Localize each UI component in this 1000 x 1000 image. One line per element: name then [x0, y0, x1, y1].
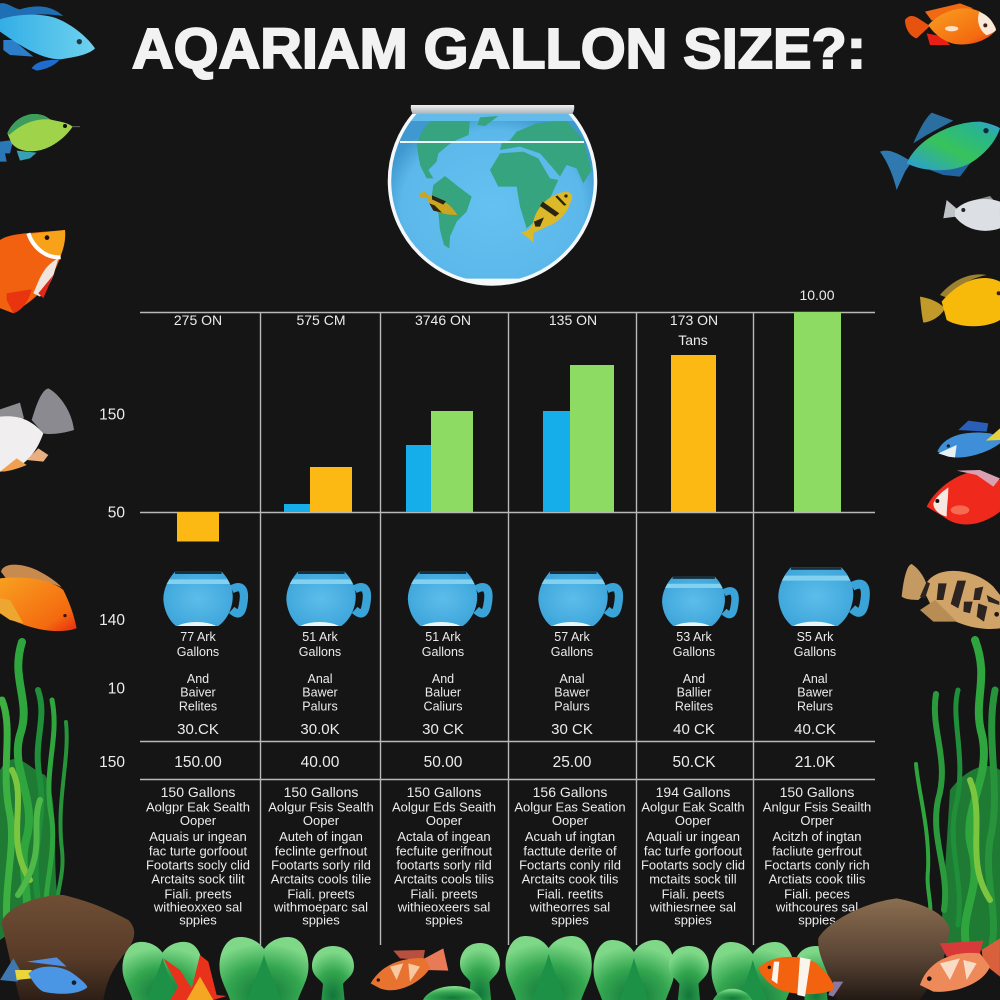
chart column headers: Tans	[678, 332, 708, 348]
chart column headers: 575 CM	[296, 312, 346, 328]
fish: orange clownfish left	[0, 230, 65, 313]
column 4 tank labels: Gallons	[551, 645, 593, 659]
column 5 tank labels: Gallons	[673, 645, 715, 659]
title: AQARIAM GALLON SIZE?:	[132, 17, 866, 81]
chart column headers: 10.00	[799, 287, 835, 303]
column 6 tank labels: Anal	[802, 672, 828, 686]
column 4 description: 156 Gallons	[533, 784, 607, 800]
chart column headers: 3746 ON	[415, 312, 471, 328]
column 2 description: feclinte gerfnout	[275, 844, 368, 858]
fish: small blue right	[937, 421, 1000, 458]
column 5 description: Fiali. peets	[662, 886, 725, 902]
fish: yellow right	[920, 274, 1000, 326]
fish: flame bottom	[163, 955, 227, 1000]
column 2 description: 150 Gallons	[284, 784, 358, 800]
icon: large bowl fish	[521, 192, 572, 243]
column 2 tank labels: Bawer	[302, 686, 338, 700]
column 2 tank labels: 30.0K	[300, 721, 340, 738]
column 6 tank labels: Gallons	[794, 645, 836, 659]
column 1 description: Arctaits sock tilit	[151, 872, 245, 886]
column 2 tank labels: Gallons	[299, 645, 341, 659]
column 3 description: Fiali. preets	[410, 886, 478, 902]
fish: green left	[0, 114, 80, 162]
column 5 description: Footarts socly clid	[641, 858, 745, 872]
column 4 description	[514, 784, 626, 928]
column 6 tank labels: 40.CK	[794, 721, 836, 738]
fish: red white bottom right	[920, 938, 1000, 992]
column 5 description: 194 Gallons	[656, 784, 730, 800]
column 1 tank labels: Relites	[179, 700, 217, 714]
column 4 description: Foctarts conly rild	[519, 858, 621, 872]
column 1 description: 150 Gallons	[161, 784, 235, 800]
column 5 tank labels: 40 CK	[673, 721, 715, 738]
column 5 description: mctaits sock till	[649, 872, 737, 886]
column 2 description: Ooper	[303, 813, 340, 828]
column 1 description: Aquais ur ingean	[149, 829, 247, 844]
column 3 description: Actala of ingean	[397, 829, 491, 844]
column 6 description	[763, 784, 871, 928]
column 6 description: Orper	[800, 813, 834, 828]
column 6 tank labels: 21.0K	[795, 754, 836, 771]
column 2 tank labels: Anal	[307, 672, 333, 686]
column 1 tank labels: 150.00	[174, 754, 222, 771]
column 6 tank labels	[794, 630, 836, 771]
column 5 description: sppies	[674, 912, 712, 928]
column 2 description: withmoeparc sal	[273, 900, 368, 914]
chart column headers: 173 ON	[670, 312, 718, 328]
column 5 description: Ooper	[675, 813, 712, 828]
column 3 description: Aolgur Eds Seaith	[392, 800, 496, 814]
column 3 tank labels: And	[432, 672, 454, 686]
column 6 description: Anlgur Fsis Seailth	[763, 800, 871, 814]
column 5 tank labels: 53 Ark	[676, 630, 712, 644]
column 2 description: Fiali. preets	[287, 886, 355, 902]
seaweed left	[0, 642, 67, 945]
column 3 description: fecfuite gerifnout	[396, 844, 492, 858]
column 2 description: Footarts sorly rild	[271, 858, 371, 872]
column 5 tank labels: Relites	[675, 700, 713, 714]
column 6 tank labels: Relurs	[797, 700, 833, 714]
column 3 tank labels: 51 Ark	[425, 630, 461, 644]
icon: small bowl fish	[419, 192, 457, 215]
column 5 description: Aquali ur ingean	[646, 829, 740, 844]
column 2 description: Auteh of ingan	[279, 829, 363, 844]
fish: red white right	[927, 470, 1000, 524]
column 4 description: witheorres sal	[529, 900, 610, 914]
axis labels: 10	[108, 680, 125, 698]
column 4 description: Arctaits cook tilis	[522, 872, 619, 886]
column 6 tank labels: Bawer	[797, 686, 833, 700]
column 1 description: Footarts socly clid	[146, 858, 250, 872]
column 2 description: Arctaits cools tilie	[271, 872, 371, 886]
column 2 tank labels	[299, 630, 341, 771]
column 6 description: Fiali. peces	[784, 886, 850, 902]
column 3 tank labels: Gallons	[422, 645, 464, 659]
column 3 description: Ooper	[426, 813, 463, 828]
column 3 tank labels: 30 CK	[422, 721, 464, 738]
column 2 description	[268, 784, 374, 928]
column 3 description	[392, 784, 496, 928]
column 5 tank labels	[672, 630, 716, 771]
fish: clownfish bottom	[758, 957, 843, 997]
column 2 tank labels: 40.00	[301, 754, 340, 771]
column 5 tank labels: 50.CK	[672, 754, 716, 771]
column 1 description: withieoxxeo sal	[153, 900, 242, 914]
bar chart	[177, 312, 841, 542]
column 3 tank labels: 50.00	[424, 754, 463, 771]
column 1 description: fac turte gorfoout	[149, 844, 248, 858]
column 5 description: withiesrnee sal	[649, 900, 736, 914]
column 1 tank labels	[174, 630, 222, 771]
column 4 tank labels: Anal	[559, 672, 585, 686]
chart column headers	[174, 287, 835, 348]
column 4 tank labels: Bawer	[554, 686, 590, 700]
column 6 description: 150 Gallons	[780, 784, 854, 800]
column 1 description	[146, 784, 250, 928]
column 6 description: withcoures sal	[775, 900, 858, 914]
column 1 description: sppies	[179, 912, 217, 928]
fish: orange top right	[905, 3, 996, 45]
column 4 description: Aolgur Eas Seation	[514, 800, 626, 814]
column 4 tank labels: 30 CK	[551, 721, 593, 738]
column 4 description: Acuah uf ingtan	[525, 829, 615, 844]
column 6 description: Arctiats cook tilis	[769, 872, 866, 886]
column 5 description	[641, 784, 745, 928]
chart column headers: 275 ON	[174, 312, 222, 328]
chart grid lines	[140, 312, 875, 945]
column 2 description: Aolgur Fsis Sealth	[268, 800, 374, 814]
column 3 tank labels: Baluer	[425, 686, 461, 700]
fish: silver right	[943, 196, 1000, 231]
column 4 tank labels: 57 Ark	[554, 630, 590, 644]
column 3 description: withieoxeers sal	[397, 900, 490, 914]
column 3 description: Arctaits cools tilis	[394, 872, 494, 886]
column 3 tank labels	[422, 630, 464, 771]
icon: tank mugs	[163, 567, 865, 626]
fish: tiger right	[902, 564, 1000, 629]
fish: orange patterned bottom	[371, 948, 448, 990]
column 6 description: sppies	[798, 912, 836, 928]
rock left	[2, 895, 134, 1000]
column 6 description: Foctarts conly rich	[764, 858, 870, 872]
fish: green blue right	[880, 113, 1000, 190]
column 1 description: Aolgpr Eak Sealth	[146, 800, 250, 814]
column 1 tank labels: Gallons	[177, 645, 219, 659]
column 2 tank labels: 51 Ark	[302, 630, 338, 644]
column 2 description: sppies	[302, 912, 340, 928]
column 5 description: Aolgur Eak Scalth	[641, 800, 745, 814]
seaweed right	[916, 640, 1000, 950]
column 4 description: Ooper	[552, 813, 589, 828]
column 6 description: facliute gerfrout	[772, 844, 862, 858]
axis labels: 50	[108, 504, 125, 522]
axis labels: 140	[99, 612, 125, 629]
column 3 description: footarts sorly rild	[396, 858, 492, 872]
column 6 tank labels: S5 Ark	[797, 630, 834, 644]
bottom plants	[122, 936, 837, 1000]
icon: globe fish bowl	[390, 105, 596, 285]
column 4 description: Fiali. reetits	[537, 886, 604, 902]
column 4 description: facttute derite of	[523, 844, 617, 858]
column 1 description: Ooper	[180, 813, 217, 828]
column 4 description: sppies	[551, 912, 589, 928]
column 1 description: Fiali. preets	[164, 886, 232, 902]
column 2 tank labels: Palurs	[302, 700, 338, 714]
column 1 tank labels: 30.CK	[177, 721, 219, 738]
column 4 tank labels: 25.00	[553, 754, 592, 771]
column 4 tank labels	[551, 630, 593, 771]
column 3 tank labels: Caliurs	[424, 700, 462, 714]
fish: white left	[0, 388, 74, 472]
axis labels: 150	[99, 754, 125, 771]
axis labels: 150	[99, 406, 125, 424]
column 1 tank labels: And	[187, 672, 209, 686]
column 1 tank labels: Baiver	[180, 686, 216, 700]
fish: orange left	[0, 565, 77, 631]
column 6 description: Acitzh of ingtan	[773, 829, 861, 844]
column 3 description: sppies	[425, 912, 463, 928]
fish: cyan blue top left	[0, 3, 95, 71]
chart column headers: 135 ON	[549, 312, 597, 328]
column 3 description: 150 Gallons	[407, 784, 481, 800]
axis labels	[99, 406, 125, 771]
column 4 tank labels: Palurs	[554, 700, 590, 714]
column 5 tank labels: Ballier	[677, 686, 711, 700]
column 5 description: fac turfe gorfoout	[644, 844, 743, 858]
rock right	[818, 898, 950, 1000]
fish: blue bottom left	[0, 957, 87, 994]
column 1 tank labels: 77 Ark	[180, 630, 216, 644]
column 5 tank labels: And	[683, 672, 705, 686]
